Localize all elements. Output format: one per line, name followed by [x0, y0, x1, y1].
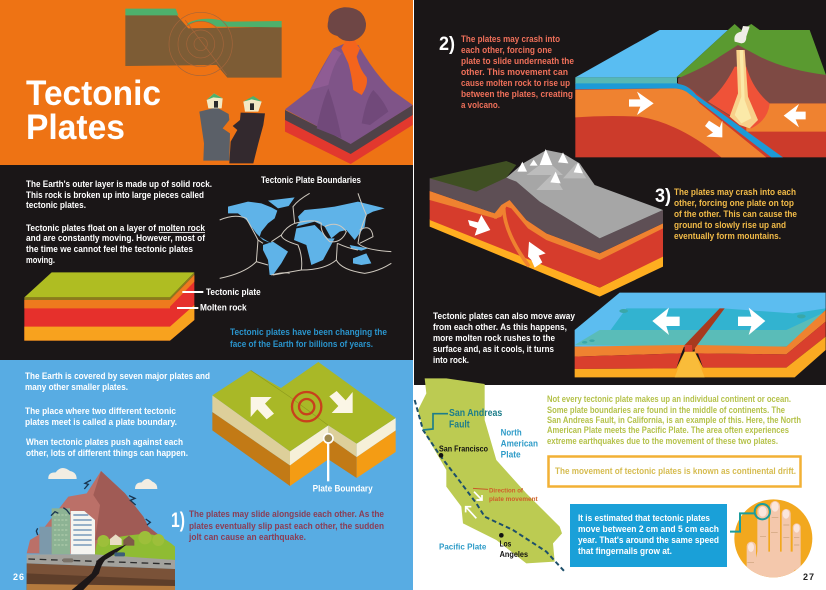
text block: San Andreas explanation: American Plate meets the Pacific Plate. The area often experiences — [547, 425, 789, 435]
diagram: subduction volcano block — [575, 24, 826, 157]
icon: clouds — [48, 468, 157, 489]
label: Los Angeles — [499, 533, 529, 559]
panel: black explanation section — [0, 165, 413, 360]
number: step 3: 3) — [655, 186, 671, 207]
text block: outer layer intro: tectonic plates. — [26, 200, 86, 210]
diagram: mountain collision block — [430, 149, 663, 297]
page number 27: 27 — [803, 572, 814, 582]
panel: black right page section — [414, 0, 826, 385]
text block: step 2 volcano: each other, forcing one — [461, 45, 552, 55]
callout: continental drift — [548, 456, 800, 486]
map: California and San Andreas Fault — [415, 378, 565, 572]
text block: outer layer intro: The Earth's outer layer is made up of solid rock. — [26, 179, 212, 189]
text block: step 1 earthquake: jolt can cause an earthquake. — [188, 532, 306, 542]
text block: plates moving apart — [433, 311, 575, 365]
text block: step 2 volcano: between the plates, creating — [461, 89, 573, 99]
icon: arrow — [468, 215, 490, 236]
text block: step 2 volcano — [461, 34, 574, 110]
text block: step 3 mountains: The plates may crash into each — [674, 187, 796, 197]
callout: fingernail growth: year. That's around the same speed — [578, 535, 719, 545]
text block: outer layer intro: and are constantly moving. However, most of — [26, 233, 206, 243]
icon: fault cross-section with seismic rings — [125, 9, 282, 78]
icon: fingernail magnifier callout — [730, 504, 770, 532]
text block: outer layer intro: the time we cannot feel the tectonic plates — [26, 244, 193, 254]
title: Tectonic — [26, 74, 161, 113]
callout: billions of years: Tectonic plates have been changing the — [230, 327, 387, 337]
title: Plates — [26, 108, 125, 147]
icon: car — [63, 558, 73, 562]
text block: outer layer intro: Tectonic plates float on a layer of molten rock — [26, 223, 206, 233]
text block: seven major plates: The place where two different tectonic — [25, 406, 176, 416]
label: San Francisco — [439, 445, 488, 458]
icon: arrow left — [652, 308, 680, 335]
text block: step 2 volcano: The plates may crash into — [461, 34, 560, 44]
number: step 2: 2) — [439, 34, 455, 55]
label: direction of plate movement — [473, 487, 539, 503]
text block: step 3 mountains: ground to slowly rise up and — [674, 220, 786, 230]
icon: erupting volcano block — [285, 7, 413, 164]
illustration: earthquake city scene — [27, 468, 175, 590]
icon: plate movement arrows — [466, 492, 482, 518]
callout: fingernail growth — [570, 504, 727, 567]
label: tectonic plate: Tectonic plate — [206, 287, 261, 297]
diagram: plate boundary block — [212, 362, 396, 493]
text block: step 2 volcano: other. This movement can — [461, 67, 568, 77]
diagram: spreading plates block — [575, 293, 826, 377]
text block: step 1 earthquake — [188, 509, 384, 542]
icon: arrow down-right — [705, 121, 722, 137]
text block: seven major plates: plates meet is called a plate boundary. — [25, 417, 177, 427]
callout: fingernail growth: that fingernails grow at. — [578, 546, 672, 556]
text block: step 1 earthquake: The plates may slide alongside each other. As the — [189, 509, 384, 519]
label: San Andreas Fault: Fault — [449, 420, 470, 431]
label: tectonic plate — [182, 287, 261, 297]
chart: world map of plate boundaries — [220, 193, 391, 278]
label: San Andreas Fault — [423, 408, 503, 431]
panel: blue plates section — [0, 360, 413, 590]
icon: office buildings — [39, 508, 95, 554]
text block: seven major plates: The Earth is covered by seven major plates and — [25, 371, 210, 381]
label: North American Plate — [501, 428, 538, 459]
text block: seven major plates: many other smaller plates. — [25, 382, 128, 392]
label: Los Angeles: Los — [500, 540, 512, 549]
number: step 1: 1) — [171, 509, 185, 532]
label: molten rock — [177, 303, 247, 313]
label: plate boundary pointer — [313, 434, 373, 493]
heading: map title: Tectonic Plate Boundaries — [261, 175, 361, 185]
icon: split cliff with houses — [199, 93, 265, 163]
text block: seven major plates: other, lots of different things can happen. — [26, 448, 188, 458]
text block: plates moving apart: into rock. — [433, 355, 469, 365]
text block: outer layer intro — [26, 179, 212, 265]
callout: billions of years: face of the Earth for billions of years. — [230, 339, 373, 349]
text block: plates moving apart: Tectonic plates can also move away — [433, 311, 575, 321]
text block: plates moving apart: surface and, as it cools, it turns — [433, 344, 554, 354]
text block: San Andreas explanation: Some plate boundaries are found in the middle of continents. The — [547, 405, 785, 415]
label: North American Plate: American — [501, 439, 538, 449]
callout: billions of years — [230, 327, 387, 349]
label: San Francisco: San Francisco — [439, 445, 488, 454]
text block: step 1 earthquake: plates eventually slip past each other, the sudden — [189, 521, 384, 531]
callout: fingernail growth: move between 2 cm and 5 cm each — [578, 524, 719, 534]
label: North American Plate: North — [501, 428, 522, 438]
label: North American Plate: Plate — [501, 449, 521, 459]
icon: left arrow — [251, 397, 274, 419]
icon: arrow right — [738, 308, 765, 335]
text block: step 3 mountains: eventually form mountains. — [674, 231, 781, 241]
label: plate boundary pointer: Plate Boundary — [313, 483, 373, 493]
label: direction of plate movement: plate movement — [489, 496, 539, 503]
title — [26, 74, 161, 147]
text block: outer layer intro: moving. — [26, 255, 55, 265]
text block: step 3 mountains: of the other. This can cause the — [674, 209, 797, 219]
text block: step 3 mountains: other, forcing one plate on top — [674, 198, 794, 208]
page number 26: 26 — [13, 572, 24, 582]
icon: arrow left — [784, 104, 806, 127]
icon: arrow right — [629, 92, 654, 115]
icon: epicentre target — [292, 392, 321, 421]
icon: damaged houses — [110, 534, 134, 546]
text block: plates moving apart: from each other. As this happens, — [433, 322, 567, 332]
text block: step 3 mountains — [674, 187, 797, 241]
icon: truck on cracked road — [114, 552, 125, 556]
text block: step 2 volcano: a volcano. — [461, 100, 500, 110]
icon: arrow — [528, 242, 546, 268]
callout: fingernail growth: It is estimated that tectonic plates — [578, 513, 710, 523]
text block: San Andreas explanation: extreme earthquakes due to the movement of these two plates. — [547, 436, 778, 446]
label: Pacific Plate: Pacific Plate — [439, 541, 486, 551]
label: molten rock: Molten rock — [200, 303, 247, 313]
text block: San Andreas explanation — [547, 394, 801, 446]
text block: step 2 volcano: plate to slide underneath the — [461, 56, 574, 66]
panel: white California section — [414, 385, 826, 590]
text block: seven major plates: When tectonic plates push against each — [26, 437, 183, 447]
icon: right arrow — [329, 391, 353, 413]
text block: seven major plates — [25, 371, 210, 458]
label: direction of plate movement: Direction of — [489, 487, 524, 494]
callout: continental drift: The movement of tectonic plates is known as continental drift. — [555, 466, 796, 476]
label: Los Angeles: Angeles — [500, 550, 529, 559]
panel: orange title banner — [0, 0, 413, 165]
text block: outer layer intro: This rock is broken up into large pieces called — [26, 190, 204, 200]
icon: hand in orange circle — [730, 499, 812, 582]
diagram: layered rock block — [24, 272, 261, 341]
text block: step 2 volcano: cause molten rock to rise up — [461, 78, 570, 88]
label: San Andreas Fault: San Andreas — [449, 408, 503, 419]
text block: plates moving apart: more molten rock rushes to the — [433, 333, 555, 343]
